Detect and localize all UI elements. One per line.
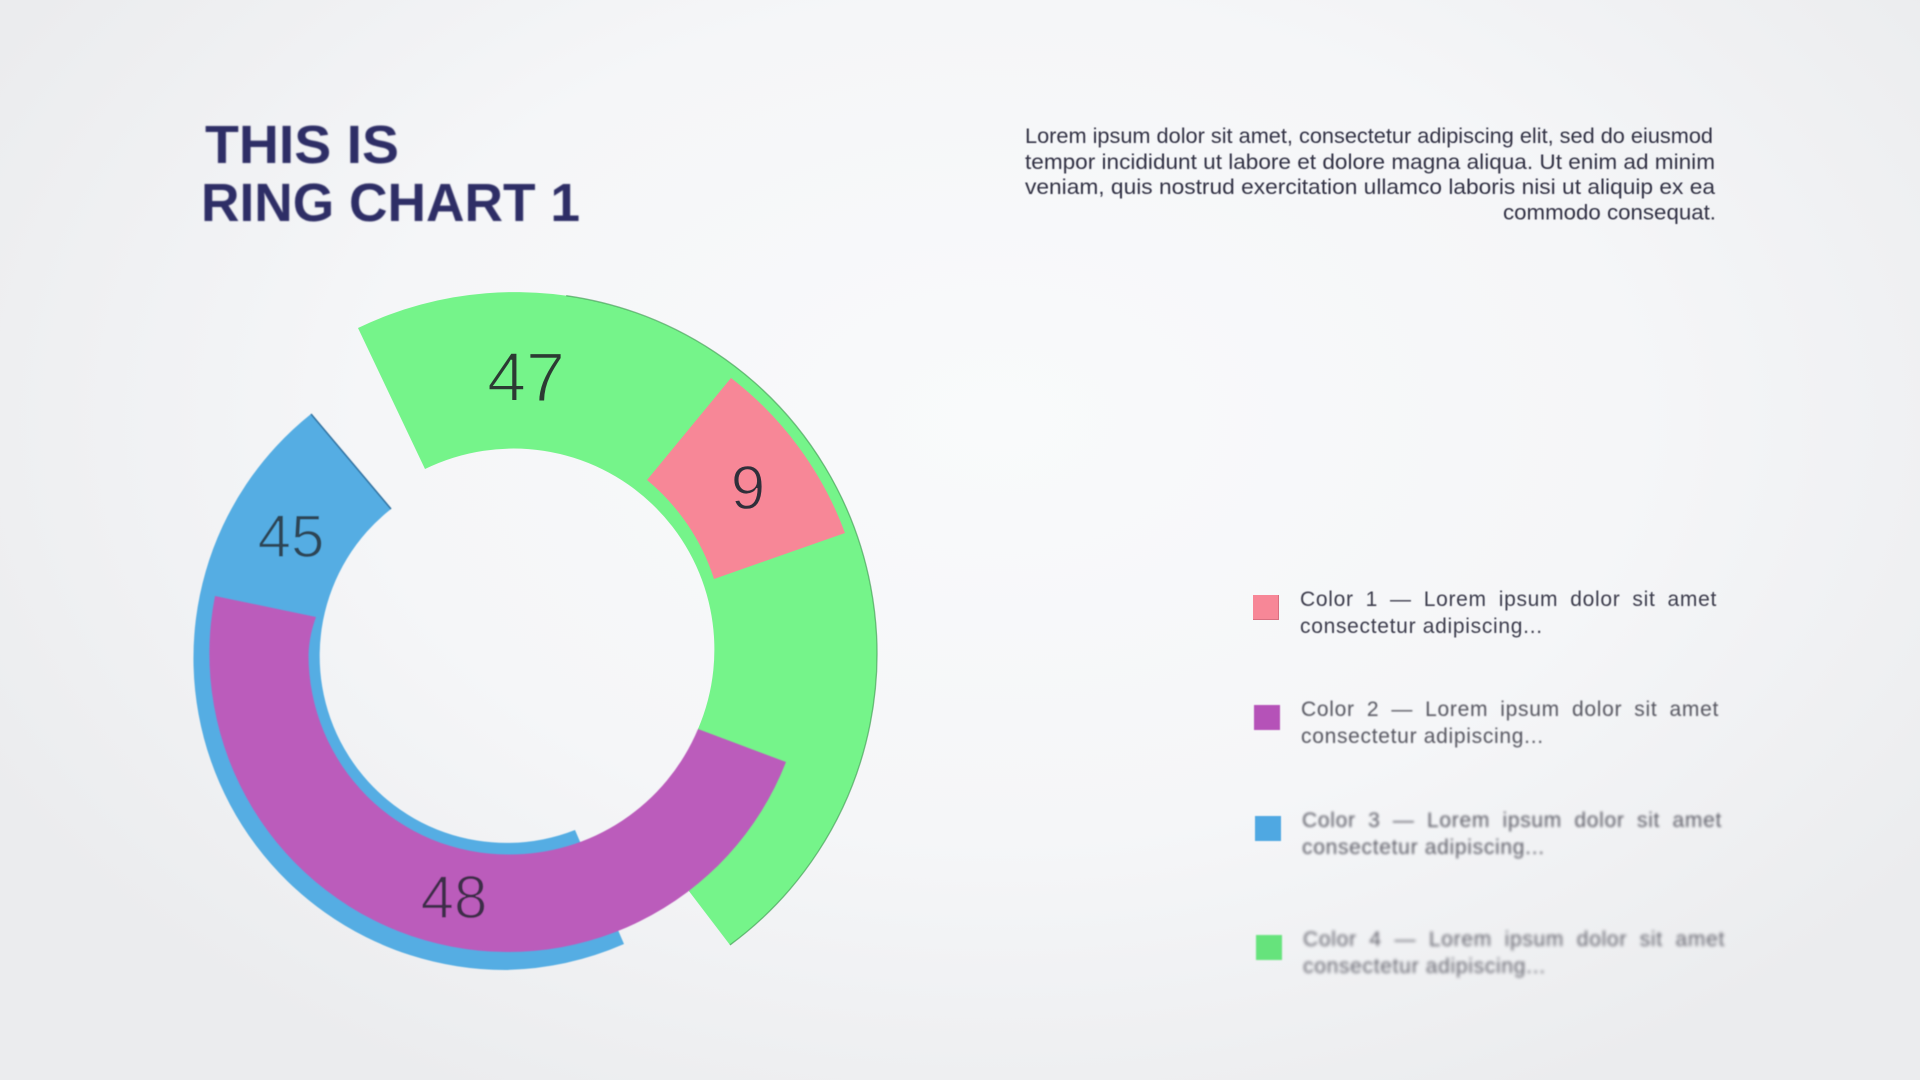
ring segment: green 47	[358, 292, 877, 945]
legend text: color 4: Color 4 — Lorem ipsum dolor sit amet consectetur adipiscing...	[1303, 928, 1725, 978]
description text	[1025, 125, 1716, 224]
ring segment: purple 48	[209, 596, 786, 952]
description text: Lorem ipsum dolor sit amet, consectetur adipiscing elit, sed do eiusmod	[1025, 125, 1713, 148]
description text: commodo consequat.	[1503, 202, 1716, 224]
legend text: color 1: Color 1 — Lorem ipsum dolor sit amet consectetur adipiscing...	[1300, 588, 1717, 638]
title: RING CHART 1	[201, 173, 580, 233]
legend text: color 3: Color 3 — Lorem ipsum dolor sit amet consectetur adipiscing...	[1302, 809, 1722, 859]
ring segment: purple 48: 48	[421, 864, 487, 931]
description text: tempor incididunt ut labore et dolore magna aliqua. Ut enim ad minim	[1025, 151, 1715, 174]
ring segment: pink 9: 9	[731, 454, 765, 523]
title	[201, 115, 580, 233]
ring segment: blue 45: 45	[258, 503, 324, 570]
legend swatch: color 1	[1253, 595, 1279, 620]
legend swatch: color 2	[1254, 705, 1280, 730]
ring segment: pink 9	[647, 378, 845, 579]
ring segment: green 47: 47	[487, 338, 565, 416]
ring segment: blue 45	[193, 414, 624, 970]
title: THIS IS	[205, 115, 399, 175]
description text: veniam, quis nostrud exercitation ullamco laboris nisi ut aliquip ex ea	[1025, 176, 1715, 199]
legend text: color 2: Color 2 — Lorem ipsum dolor sit amet consectetur adipiscing...	[1301, 698, 1719, 748]
legend swatch: color 3	[1255, 816, 1281, 841]
legend swatch: color 4	[1256, 935, 1282, 960]
